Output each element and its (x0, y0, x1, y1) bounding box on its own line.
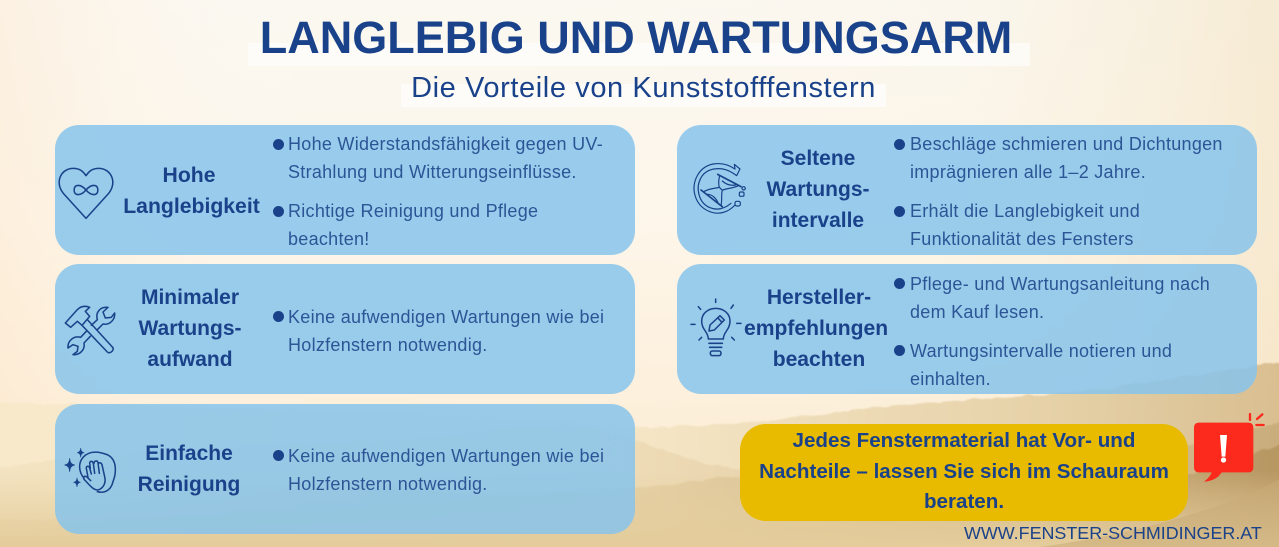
panel: Herstellerempfehlungen beachten (677, 264, 1257, 394)
callout: Jedes Fenstermaterial hat Vor- und (793, 429, 1135, 452)
bullet: Keine aufwendigen Wartungen wie bei (288, 446, 604, 466)
bullets: Pflege- und Wartungsanleitung nach (910, 274, 1210, 294)
heading (123, 164, 260, 218)
heading: empfehlungen (744, 317, 888, 340)
panel: Seltene Wartungsintervalle (677, 125, 1257, 255)
heading: aufwand (147, 348, 233, 371)
bullet (273, 307, 604, 355)
heading (138, 442, 240, 496)
heading: Hohe (163, 164, 215, 187)
bullets: einhalten. (910, 369, 991, 389)
bullets: Wartungsintervalle notieren und (910, 341, 1172, 361)
callout: beraten. (924, 490, 1004, 513)
bullet: Keine aufwendigen Wartungen wie bei (288, 307, 604, 327)
heading: Wartungs- (138, 317, 242, 340)
heading: Hersteller- (767, 286, 871, 309)
heading (744, 286, 888, 371)
bullet: Holzfenstern notwendig. (288, 335, 488, 355)
heading: Einfache (145, 442, 233, 465)
panel: Minimaler Wartungsaufwand (55, 264, 635, 394)
panel: Einfache Reinigung (55, 404, 635, 534)
heading: Seltene (781, 147, 855, 170)
bullets: Beschläge schmieren und Dichtungen (910, 134, 1223, 154)
title: LANGLEBIG UND WARTUNGSARM (260, 12, 1012, 63)
callout (740, 424, 1188, 521)
heading: Langlebigkeit (123, 195, 260, 218)
bullets: dem Kauf lesen. (910, 302, 1044, 322)
icon: hammer and wrench (64, 306, 116, 356)
heading: Wartungs- (766, 178, 870, 201)
bullets: Erhält die Langlebigkeit und (910, 201, 1140, 221)
icon: hourglass in circular arrow (693, 163, 746, 214)
bullets: imprägnieren alle 1–2 Jahre. (910, 162, 1146, 182)
bullets (273, 134, 603, 249)
heading (138, 286, 242, 371)
icon: hand wiping with sparkles (64, 448, 116, 493)
icon: light bulb with pencil (690, 298, 742, 356)
bullets: Funktionalität des Fensters (910, 229, 1134, 249)
bullets: Hohe Widerstandsfähigkeit gegen UV- (288, 134, 603, 154)
website url: WWW.FENSTER-SCHMIDINGER.AT (964, 523, 1262, 543)
subtitle: Die Vorteile von Kunststofffenstern (411, 72, 876, 104)
heading: intervalle (772, 209, 864, 232)
heading: beachten (773, 348, 865, 371)
bullets (894, 134, 1223, 249)
icon: red alert speech bubble (1194, 412, 1265, 482)
panel: Hohe Langlebigkeit (55, 125, 635, 255)
heading: Reinigung (138, 473, 240, 496)
bullets: Strahlung und Witterungseinflüsse. (288, 162, 577, 182)
bullets (894, 274, 1210, 389)
bullets: beachten! (288, 229, 370, 249)
heading (766, 147, 870, 232)
heading: Minimaler (141, 286, 239, 309)
icon: heart with infinity (58, 168, 114, 220)
bullet (273, 446, 604, 494)
bullet: Holzfenstern notwendig. (288, 474, 488, 494)
bullets: Richtige Reinigung und Pflege (288, 201, 538, 221)
callout: Nachteile – lassen Sie sich im Schauraum (759, 460, 1169, 482)
